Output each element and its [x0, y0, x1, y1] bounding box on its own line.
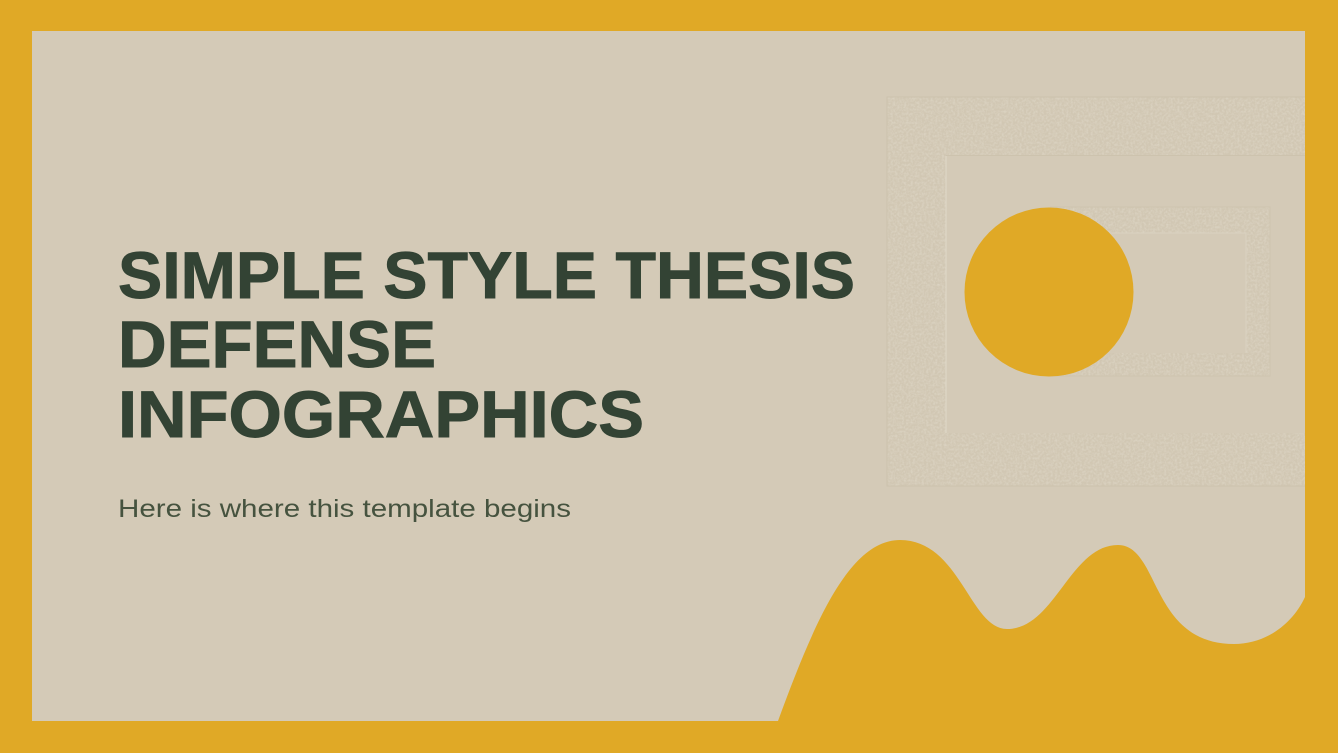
outer frame band: [887, 97, 1305, 486]
title: [118, 238, 855, 451]
embossed frames: [887, 97, 1305, 486]
inner frame band: [1050, 207, 1270, 376]
title line 1: SIMPLE STYLE THESIS: [118, 238, 855, 312]
wavy yellow shape: [778, 540, 1305, 721]
inner frame edges: [1050, 207, 1270, 376]
subtitle: Here is where this template begins: [118, 495, 571, 523]
outer frame highlight: [945, 156, 947, 433]
outer frame edges: [887, 97, 1305, 486]
title line 2: DEFENSE: [118, 307, 436, 381]
inner frame highlight: [1075, 233, 1246, 353]
title line 3: INFOGRAPHICS: [118, 377, 644, 451]
yellow circle: [964, 208, 1134, 376]
